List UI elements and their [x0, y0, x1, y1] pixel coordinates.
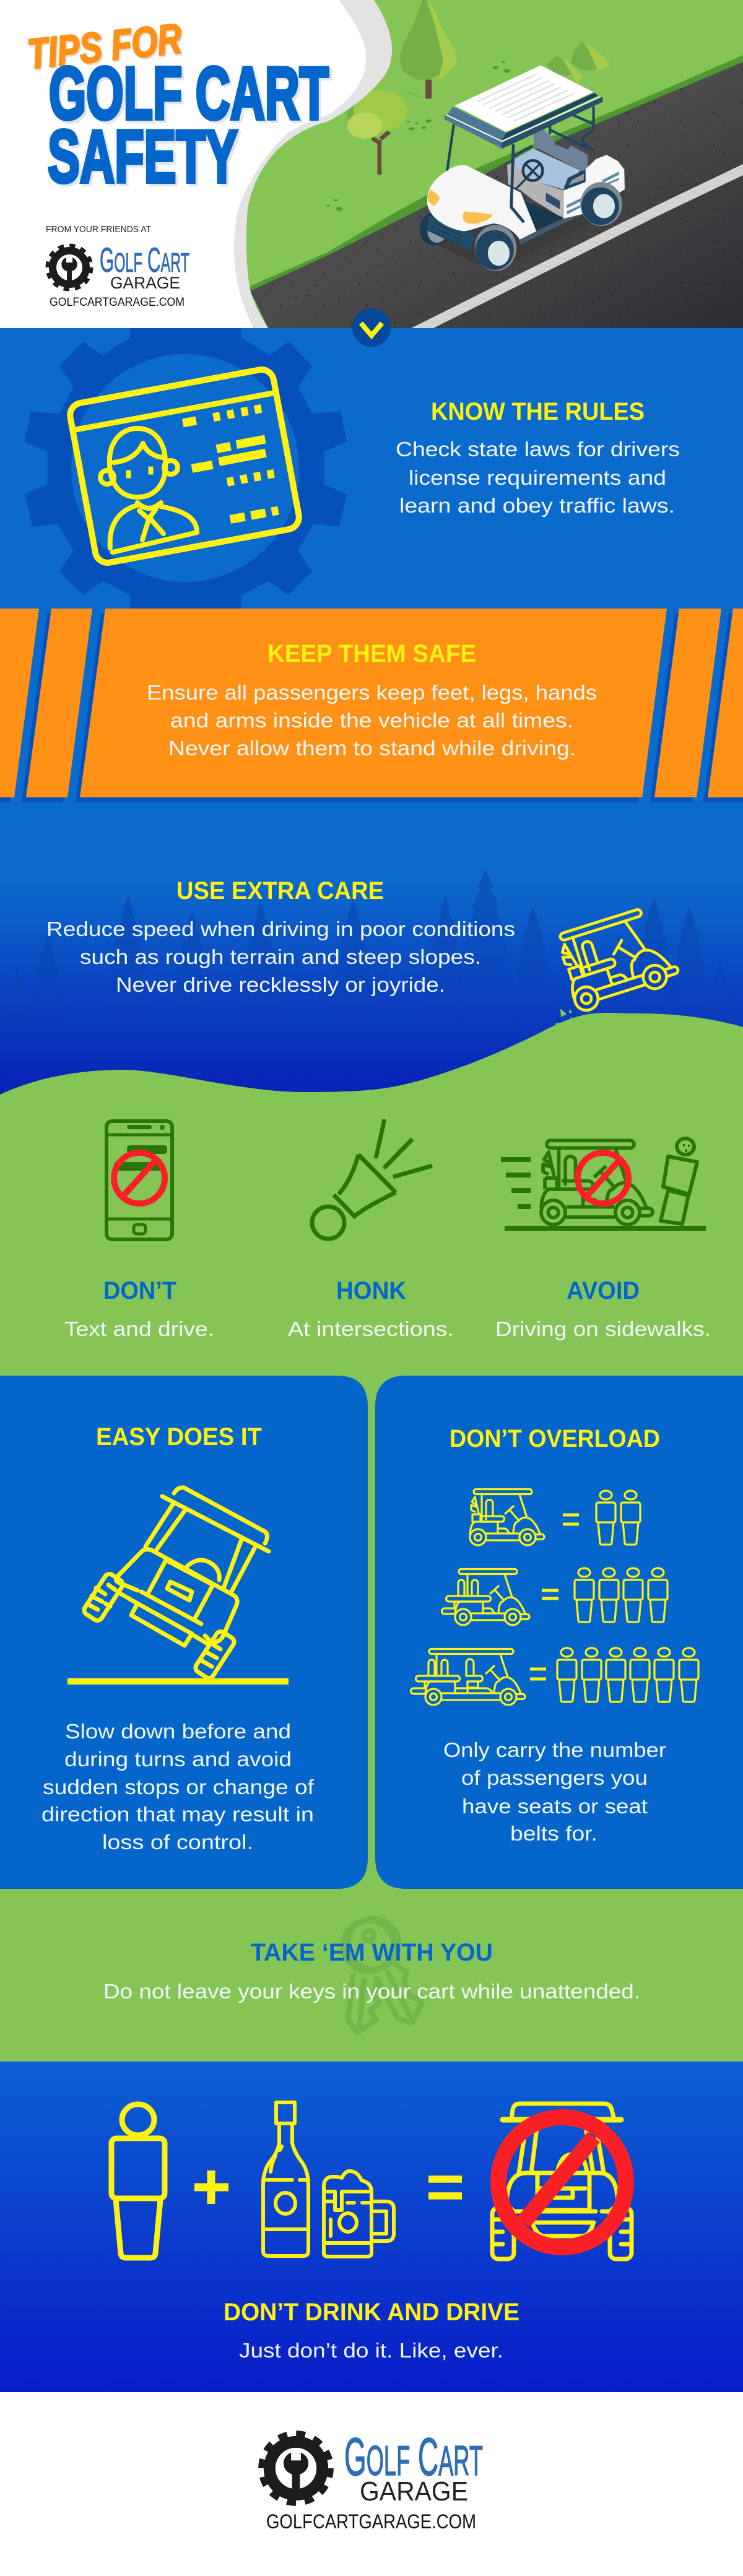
icon: prohibition sign: [498, 2117, 626, 2247]
use extra care text: Never drive recklessly or joyride.: [116, 973, 445, 996]
use extra care text: such as rough terrain and steep slopes.: [80, 945, 481, 968]
icon: tilted golf cart: [554, 903, 682, 1013]
footer logo: GOLFCARTGARAGE.COM: [266, 2510, 476, 2533]
trees and shrubs: [326, 0, 610, 210]
tip labels: [64, 1277, 711, 1340]
tip labels: At intersections.: [288, 1317, 454, 1340]
icon: cart and pedestrian: [501, 1138, 706, 1231]
panel: keep them safe: [0, 609, 743, 802]
icon: chevron badge: [352, 308, 391, 347]
footer logo: GOLF CART: [344, 2427, 483, 2487]
body text: [396, 438, 680, 517]
footer logo: [0, 2392, 743, 2576]
title: GOLF CART: [49, 52, 329, 135]
body text: [147, 681, 597, 760]
icon: cart front view: [492, 2104, 632, 2259]
body text: Never allow them to stand while driving.: [168, 737, 576, 760]
body text: [41, 1720, 315, 1854]
heading: KEEP THEM SAFE: [267, 640, 476, 667]
tip labels: HONK: [336, 1277, 406, 1304]
header logo: GARAGE: [110, 274, 180, 292]
icon: beer mug: [324, 2171, 394, 2257]
tip labels: DON’T: [103, 1277, 176, 1304]
row: four seater: [442, 1568, 667, 1625]
header logo: GOLF CART: [100, 240, 189, 279]
row: six seater: [411, 1648, 698, 1705]
icon: bottle: [263, 2102, 308, 2256]
body text: direction that may result in: [41, 1803, 314, 1826]
road: [250, 55, 743, 328]
icon: keys: [343, 1919, 422, 2032]
tips row: [64, 1119, 711, 1340]
band shadow: [0, 614, 743, 802]
icon: horn: [312, 1119, 432, 1239]
body text: Check state laws for drivers: [396, 438, 680, 461]
heading: EASY DOES IT: [96, 1423, 262, 1451]
icon: license person: [100, 428, 197, 552]
tip labels: Driving on sidewalks.: [495, 1317, 711, 1340]
white header curve: [0, 0, 392, 328]
panel: don't drink and drive: [0, 2062, 743, 2392]
footer logo: GARAGE: [360, 2476, 468, 2507]
panel: take 'em with you: Do not leave your keys in your cart while unattended.: [103, 1980, 640, 2003]
panel: don't overload: [375, 1376, 743, 1889]
title: [25, 15, 331, 201]
panel: easy does it: [0, 1376, 368, 1889]
body text: Only carry the number: [443, 1738, 666, 1761]
orange band: [0, 609, 743, 797]
body text: have seats or seat: [462, 1795, 648, 1818]
icon: phone no texting: [106, 1121, 172, 1239]
tips for: TIPS FOR: [25, 15, 184, 78]
title: SAFETY: [48, 115, 238, 198]
title: SAFETY: [50, 118, 240, 201]
forest silhouette: [0, 869, 742, 1046]
body text: loss of control.: [102, 1831, 253, 1854]
green hill: [0, 1013, 743, 2068]
icon: plus: [194, 2171, 228, 2204]
tip labels: AVOID: [567, 1277, 640, 1304]
body text: and arms inside the vehicle at all times.: [170, 709, 573, 732]
icon: equals: [428, 2179, 462, 2196]
header logo: GOLFCARTGARAGE.COM: [50, 296, 185, 309]
panel: take 'em with you: [103, 1919, 640, 2032]
panel: use extra care background: [0, 797, 743, 1107]
body text: sudden stops or change of: [43, 1776, 315, 1798]
tips for: TIPS FOR: [27, 17, 185, 80]
golf cart safety: GOLF CART: [51, 54, 331, 137]
body text: license requirements and: [409, 466, 666, 489]
golf cart illustration: [420, 65, 625, 271]
heading: DON’T DRINK AND DRIVE: [224, 2299, 519, 2326]
icon: tipping cart: [82, 1488, 269, 1680]
body text: [443, 1738, 666, 1845]
body text: Just don’t do it. Like, ever.: [239, 2339, 503, 2362]
body text: belts for.: [510, 1822, 597, 1845]
use extra care text: [46, 877, 515, 996]
row: two seater: [470, 1490, 640, 1545]
header panel: [0, 0, 743, 328]
panel: know the rules: [0, 328, 743, 805]
header logo: [46, 224, 189, 309]
body text: of passengers you: [461, 1766, 648, 1789]
use extra care text: Reduce speed when driving in poor conditions: [46, 917, 515, 940]
use extra care text: USE EXTRA CARE: [176, 877, 384, 904]
body text: Ensure all passengers keep feet, legs, hands: [147, 681, 597, 704]
heading: DON’T OVERLOAD: [450, 1425, 660, 1452]
icon: license card: [68, 368, 301, 565]
heading: KNOW THE RULES: [431, 398, 645, 425]
icon: flying turf: [555, 1008, 578, 1028]
tip labels: Text and drive.: [64, 1317, 214, 1340]
body text: learn and obey traffic laws.: [399, 494, 675, 517]
panel: take 'em with you: TAKE ‘EM WITH YOU: [251, 1939, 493, 1966]
header logo: FROM YOUR FRIENDS AT: [46, 224, 151, 235]
body text: during turns and avoid: [64, 1748, 292, 1771]
gear background: [25, 328, 347, 609]
body text: Slow down before and: [65, 1720, 291, 1743]
icon: person: [111, 2104, 165, 2258]
